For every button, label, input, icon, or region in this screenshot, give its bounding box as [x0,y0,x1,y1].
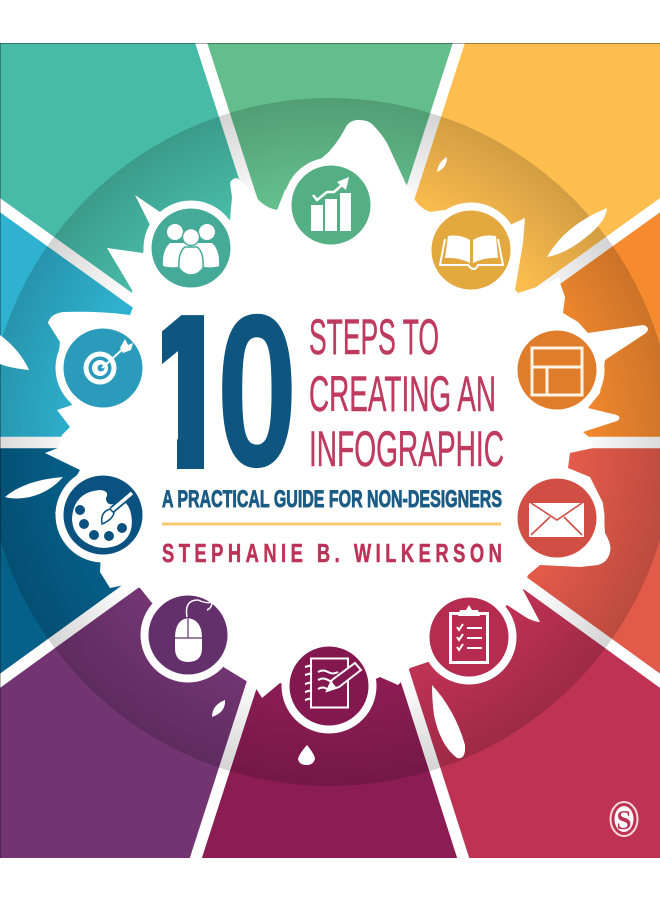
heading lines: STEPS TO [309,309,439,365]
icon: layout [518,330,596,410]
icon: palette and brush [64,476,142,554]
big numeral 10 [143,270,298,513]
publisher logo: S [616,805,632,835]
icon: envelope [518,478,596,558]
big numeral 10: 0 [216,270,298,513]
icon: chart [292,166,370,244]
icon: computer mouse [148,596,228,674]
icon: target [64,328,142,408]
splash droplets [0,157,607,765]
icon: people [152,208,230,288]
white splash [0,120,648,765]
icon: book [432,210,510,290]
icon: clipboard [430,598,508,676]
subtitle: A PRACTICAL GUIDE FOR NON-DESIGNERS [162,486,502,513]
big numeral 10: 1 [143,275,234,511]
title block [143,270,504,568]
author: STEPHANIE B. WILKERSON [162,539,502,568]
heading lines: CREATING AN [309,366,496,422]
publisher logo [610,802,638,836]
icon: notepad and pencil [290,646,368,726]
heading lines [309,309,504,477]
rule [162,522,501,526]
heading lines: INFOGRAPHIC [309,421,504,477]
